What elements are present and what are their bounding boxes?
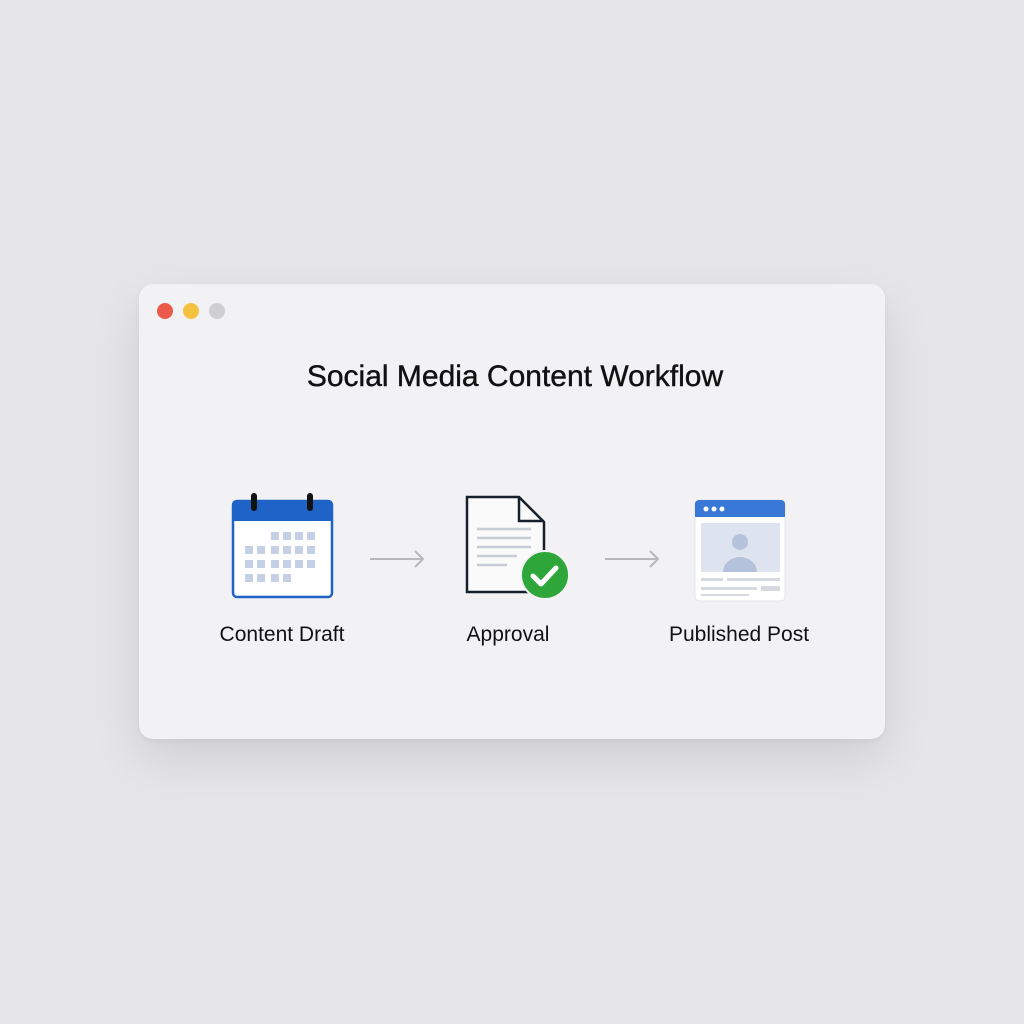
- label: published post: Published Post: [669, 623, 809, 646]
- arrow 2: [605, 551, 658, 567]
- title: Social Media Content Workflow: [307, 360, 723, 393]
- label: approval: Approval: [467, 623, 549, 646]
- icon: published post: [695, 500, 785, 601]
- window controls: [157, 303, 225, 319]
- icon: document with check: [467, 497, 569, 599]
- label: content draft: Content Draft: [220, 623, 344, 646]
- window panel: [139, 284, 885, 739]
- arrow 1: [370, 551, 423, 567]
- icon: calendar: [233, 493, 332, 597]
